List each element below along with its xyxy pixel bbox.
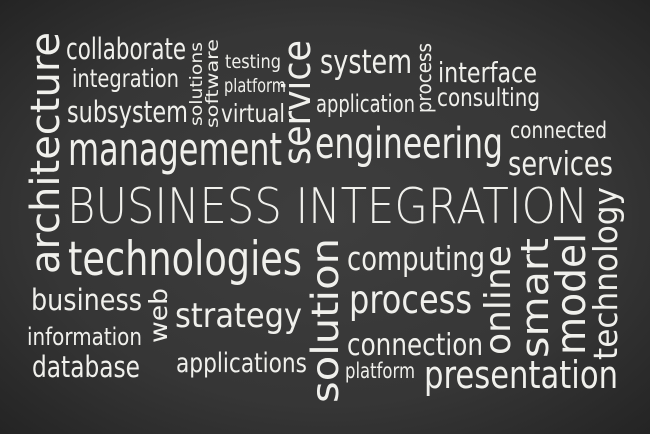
word: consulting: consulting (437, 83, 540, 112)
word: application: application (316, 90, 415, 118)
word: software: software (203, 39, 223, 128)
word: computing: computing (347, 239, 485, 278)
word: database: database (32, 350, 140, 384)
word: architecture: architecture (23, 32, 69, 274)
title: business integration: BUSINESS INTEGRATION (67, 178, 588, 235)
word: process: process (349, 278, 472, 323)
word: subsystem: subsystem (67, 95, 188, 129)
word: business: business (31, 283, 142, 317)
word: interface: interface (438, 56, 537, 89)
word: integration: integration (72, 64, 179, 93)
word: engineering: engineering (315, 119, 503, 169)
word: smart: smart (513, 238, 557, 358)
word: model: model (547, 233, 595, 355)
word: collaborate: collaborate (66, 32, 186, 66)
word: technologies: technologies (68, 232, 302, 287)
word: applications: applications (176, 348, 307, 379)
word: connected: connected (510, 118, 607, 144)
word: services: services (508, 144, 613, 183)
word: solutions: solutions (187, 42, 207, 126)
word: platform: platform (224, 75, 286, 97)
word: online: online (478, 245, 519, 355)
word: system: system (320, 42, 412, 81)
word cloud (23, 32, 625, 403)
word: virtual: virtual (221, 99, 285, 128)
word: strategy: strategy (175, 296, 302, 336)
word: process vertical: process (412, 43, 436, 113)
word: connection: connection (347, 328, 483, 363)
word: solution: solution (304, 238, 347, 403)
word: platform lower: platform (345, 359, 415, 383)
word: management: management (68, 123, 282, 176)
word: technology: technology (586, 187, 625, 360)
word: testing: testing (225, 51, 281, 73)
word: information: information (27, 323, 142, 351)
word: service: service (275, 40, 319, 165)
word: web: web (144, 288, 173, 343)
